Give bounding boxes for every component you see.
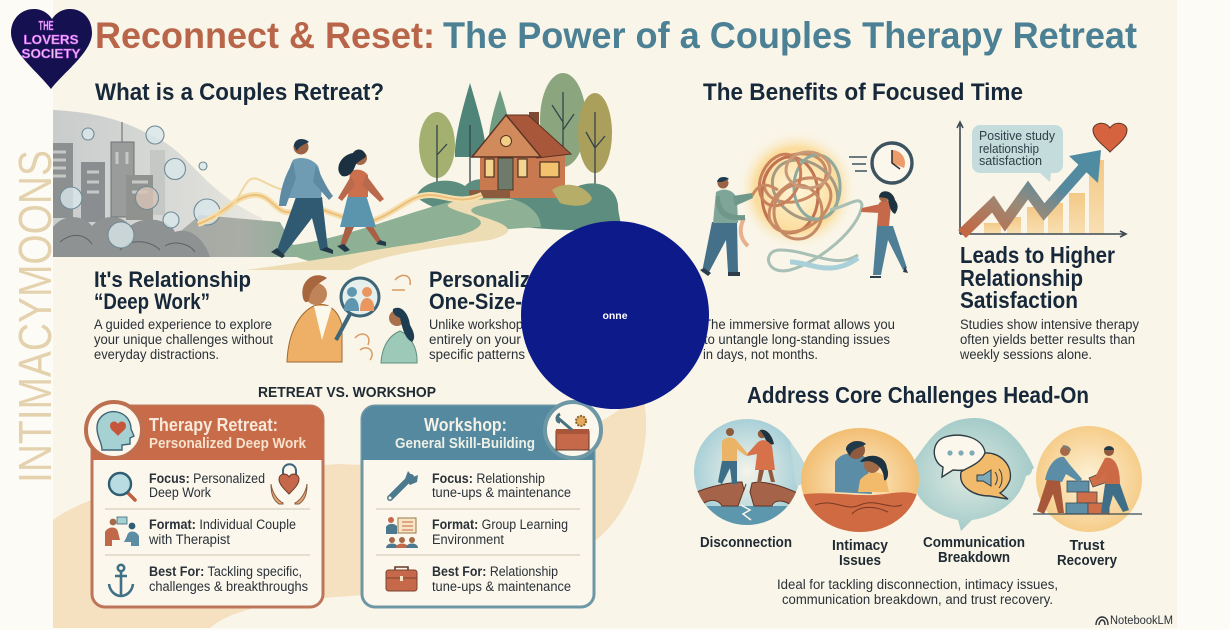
- stress bubbles: [60, 126, 220, 248]
- row: format: [386, 517, 568, 548]
- summary text: [777, 577, 1058, 607]
- axes: [957, 122, 1126, 237]
- title: Reconnect & Reset:: [95, 15, 435, 56]
- text block: Leads to higher satisfaction: weekly sessions alone.: [959, 347, 1092, 362]
- study callout: [972, 125, 1063, 182]
- challenge labels: Disconnection: [700, 535, 792, 551]
- text block: It's Relationship Deep Work: “Deep Work”: [94, 289, 210, 314]
- text block: immersive format: to untangle long-standing issues: [704, 332, 890, 347]
- text block: Leads to higher satisfaction: Studies show intensive therapy: [960, 317, 1139, 332]
- study callout: satisfaction: [979, 154, 1042, 168]
- card heading: [149, 414, 307, 452]
- centre circle overlay: onne: [602, 310, 628, 322]
- green hill: [277, 196, 541, 265]
- row: focus: [388, 471, 571, 500]
- heading: Retreat vs. Workshop: RETREAT VS. WORKSHOP: [258, 384, 436, 401]
- challenge labels: Intimacy: [832, 538, 888, 554]
- row: format: Format: Individual Couple: [149, 517, 296, 532]
- text block: Leads to higher satisfaction: [959, 242, 1139, 362]
- chart: rising relationship satisfaction: [957, 122, 1127, 237]
- row: best for: challenges & breakthroughs: [149, 579, 308, 594]
- challenge: trust recovery: [1033, 426, 1142, 532]
- text block: Personalized, partly hidden by the circle: Personaliz: [429, 267, 530, 292]
- challenge labels: Communication: [923, 535, 1025, 551]
- icon: heart padlock in hands: [271, 464, 307, 504]
- icon: wrench: [388, 471, 418, 500]
- illustration: couple walking from city to retreat house: [53, 73, 621, 270]
- text block: Personalized, partly hidden by the circle: Unlike workshop: [429, 317, 523, 332]
- text block: Personalized, partly hidden by the circle: entirely on your r: [429, 332, 529, 347]
- summary text: communication breakdown, and trust recovery.: [782, 592, 1053, 607]
- logo: The Lovers Society heart: SOCIETY: [22, 46, 81, 61]
- icon: magnifier: [109, 473, 135, 500]
- challenge: intimacy issues: [801, 428, 919, 532]
- row: focus: [109, 464, 307, 504]
- card heading: General Skill-Building: [395, 436, 535, 452]
- man walking: [271, 139, 333, 258]
- clock: [849, 143, 912, 183]
- row: format: Environment: [432, 532, 504, 547]
- embracing couple: [835, 441, 889, 494]
- card heading: Therapy Retreat:: [149, 414, 278, 435]
- logo: The Lovers Society heart: THE: [38, 18, 54, 33]
- illustration: therapist with magnifying glass: [287, 275, 417, 363]
- text block: Leads to higher satisfaction: Leads to Higher: [960, 242, 1115, 268]
- text block: Leads to higher satisfaction: often yields better results than: [960, 332, 1135, 347]
- illustration: untangling the knot with a clock: [700, 130, 912, 278]
- text block: It's Relationship Deep Work: your unique challenges without: [94, 332, 273, 347]
- icon: toolbox: [545, 402, 601, 458]
- text block: It's Relationship Deep Work: It's Relationship: [94, 267, 251, 292]
- bars: [984, 160, 1104, 234]
- beige background swoosh: [53, 390, 646, 628]
- vertical brand text: INTIMACYMOONS: INTIMACYMOONS: [9, 150, 61, 483]
- text block: immersive format: The immersive format allows you: [703, 317, 895, 332]
- text block: immersive format: in days, not months.: [703, 347, 818, 362]
- challenge labels: Trust: [1070, 538, 1105, 554]
- row: best for: [109, 564, 308, 596]
- woman pulling: [861, 191, 908, 278]
- woman walking: [337, 150, 386, 252]
- challenge labels: Issues: [839, 553, 881, 569]
- icon: head with heart: [86, 402, 142, 458]
- logo: The Lovers Society heart: [11, 9, 92, 89]
- study callout: relationship: [979, 142, 1039, 156]
- heading: Address Core Challenges Head-On: Address Core Challenges Head-On: [747, 382, 1089, 408]
- text block: Leads to higher satisfaction: Relationship: [960, 265, 1083, 291]
- row dividers: [376, 509, 580, 555]
- icon: anchor: [109, 565, 133, 596]
- text block: Leads to higher satisfaction: Satisfaction: [960, 287, 1078, 313]
- row: format: [105, 517, 296, 547]
- study callout: Positive study: [979, 129, 1056, 143]
- challenge labels: [700, 535, 1117, 569]
- title: The Power of a Couples Therapy Retreat: [443, 15, 1137, 56]
- icon: briefcase: [386, 567, 417, 591]
- row: format: Format: Group Learning: [432, 517, 568, 532]
- winding path: [245, 199, 514, 270]
- card heading: Workshop:: [424, 414, 507, 435]
- icon: group presentation: [386, 517, 418, 548]
- challenge labels: Recovery: [1057, 553, 1117, 569]
- challenge labels: Breakdown: [938, 550, 1010, 566]
- row: focus: tune-ups & maintenance: [432, 485, 571, 500]
- panel: therapy retreat card: [86, 402, 323, 607]
- text block: Personalized, partly hidden by the circle: [429, 267, 530, 362]
- brick stack: [1066, 470, 1113, 514]
- row: focus: Deep Work: [149, 485, 211, 500]
- text block: It's Relationship Deep Work: [94, 267, 273, 362]
- row dividers: [105, 509, 310, 555]
- retreat house: [469, 112, 592, 206]
- text block: It's Relationship Deep Work: A guided experience to explore: [94, 317, 272, 332]
- row: best for: tune-ups & maintenance: [432, 579, 571, 594]
- icon: couple with therapist: [105, 517, 139, 546]
- challenge: communication breakdown: [903, 418, 1034, 531]
- man pulling: [700, 177, 753, 276]
- grey city scene: [53, 110, 300, 257]
- text block: immersive format: [703, 317, 895, 362]
- tangled ribbons: [741, 145, 862, 271]
- challenge: disconnection: [694, 419, 804, 525]
- rising arrow: [962, 150, 1101, 234]
- summary text: Ideal for tackling disconnection, intimacy issues,: [777, 577, 1058, 592]
- card heading: Personalized Deep Work: [149, 436, 307, 452]
- row: format: with Therapist: [148, 532, 230, 547]
- heading: What is a Couples Retreat?: What is a Couples Retreat?: [95, 79, 384, 106]
- heading: The Benefits of Focused Time: The Benefits of Focused Time: [703, 79, 1023, 106]
- text block: It's Relationship Deep Work: everyday distractions.: [94, 347, 219, 362]
- centre circle overlay: [521, 221, 709, 409]
- row: best for: Best For: Relationship: [432, 564, 558, 579]
- two builders: [1037, 445, 1129, 514]
- row: focus: Focus: Relationship: [432, 471, 545, 486]
- NotebookLM mark: NotebookLM: [1110, 615, 1173, 627]
- row: best for: [386, 564, 571, 594]
- card heading: [395, 414, 535, 452]
- text block: Personalized, partly hidden by the circle: One-Size-: [429, 289, 522, 314]
- row: focus: Focus: Personalized: [149, 471, 265, 486]
- text block: Personalized, partly hidden by the circle: specific patterns: [429, 347, 525, 362]
- trees: [416, 73, 621, 230]
- golden connection wave: [198, 195, 482, 224]
- two people reaching out: [718, 428, 775, 484]
- icon: heart: [1093, 123, 1127, 152]
- row: best for: Best For: Tackling specific,: [149, 564, 302, 579]
- logo: The Lovers Society heart: LOVERS: [24, 32, 79, 47]
- panel: workshop card: [362, 402, 601, 607]
